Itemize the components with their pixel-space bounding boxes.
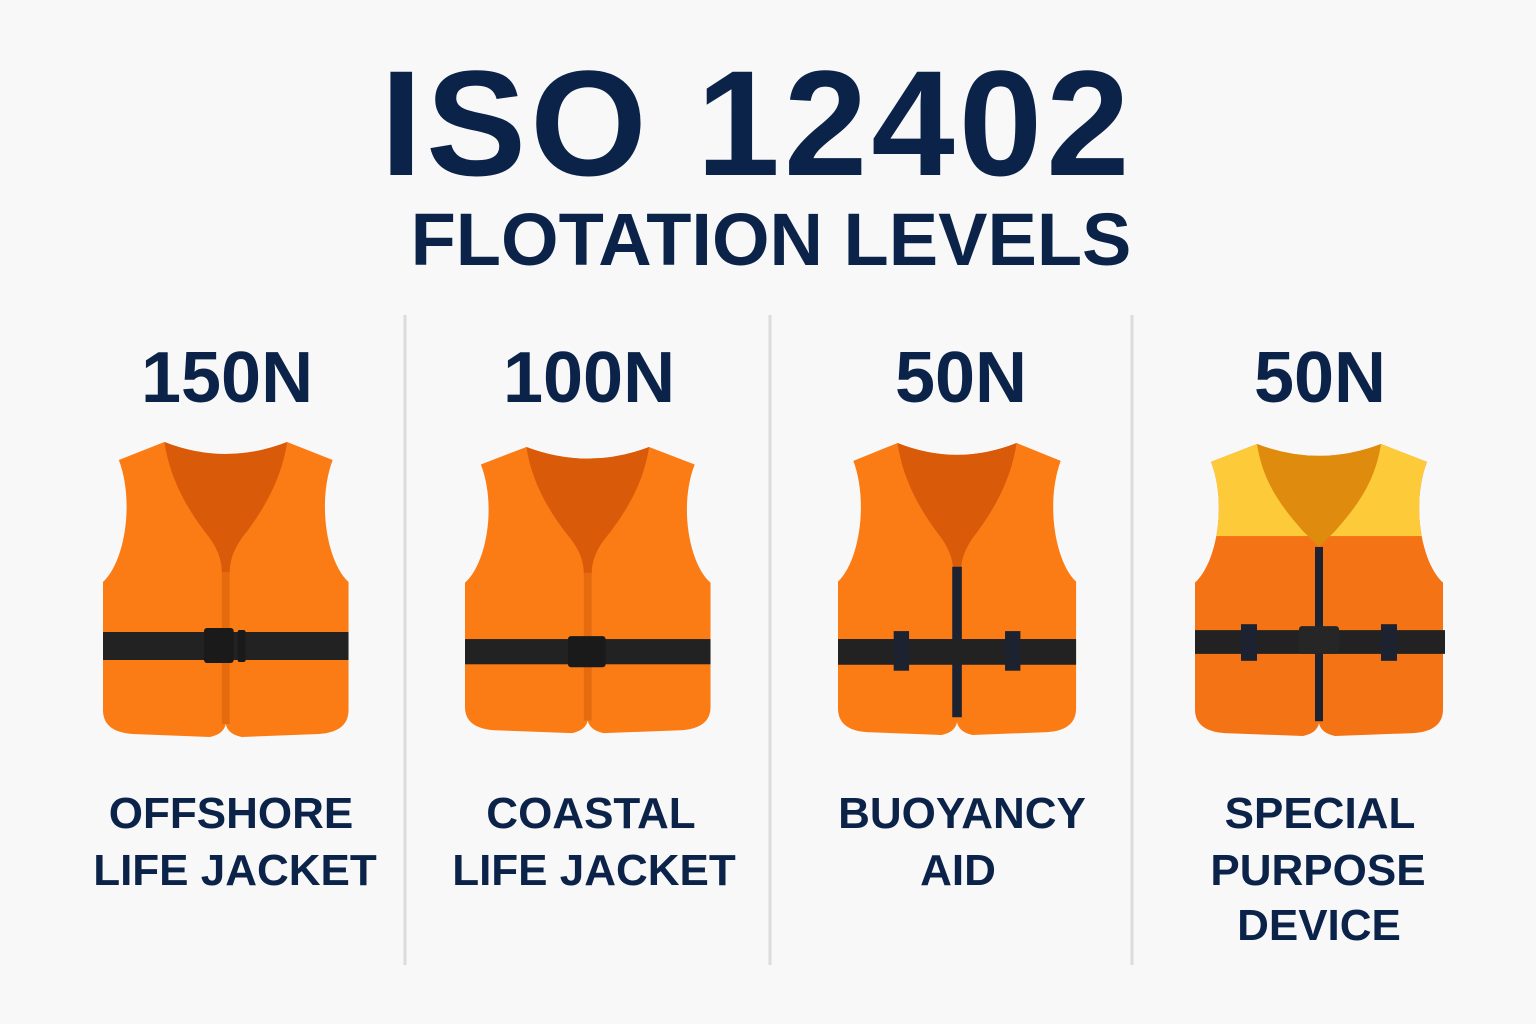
panel: 50N special purpose: DEVICE bbox=[1237, 901, 1401, 950]
rating: 150N: 150N bbox=[141, 338, 313, 418]
title: ISO 12402 bbox=[380, 39, 1134, 207]
panel: 150N offshore bbox=[93, 338, 377, 895]
panel: 100N coastal bbox=[452, 338, 736, 895]
label: BUOYANCY bbox=[838, 789, 1086, 838]
panel: 150N offshore: LIFE JACKET bbox=[93, 846, 377, 895]
panel: 50N special purpose bbox=[1195, 338, 1445, 950]
label: OFFSHORE bbox=[109, 789, 353, 838]
icon: buoyancy aid vest bbox=[838, 443, 1076, 735]
panel: 50N special purpose: PURPOSE bbox=[1210, 846, 1426, 895]
label: COASTAL bbox=[486, 789, 696, 838]
rating: 50N: 50N bbox=[1254, 338, 1386, 418]
icon: special purpose vest bbox=[1195, 444, 1445, 736]
icon: offshore vest bbox=[103, 442, 349, 737]
label: SPECIAL bbox=[1225, 789, 1415, 838]
panel: 50N buoyancy aid: AID bbox=[920, 846, 996, 895]
panel: 100N coastal: LIFE JACKET bbox=[452, 846, 736, 895]
icon: coastal vest bbox=[465, 447, 711, 733]
rating: 100N: 100N bbox=[503, 338, 675, 418]
subtitle: FLOTATION LEVELS bbox=[411, 198, 1131, 281]
panel: 50N buoyancy aid bbox=[838, 338, 1086, 895]
rating: 50N: 50N bbox=[895, 338, 1027, 418]
